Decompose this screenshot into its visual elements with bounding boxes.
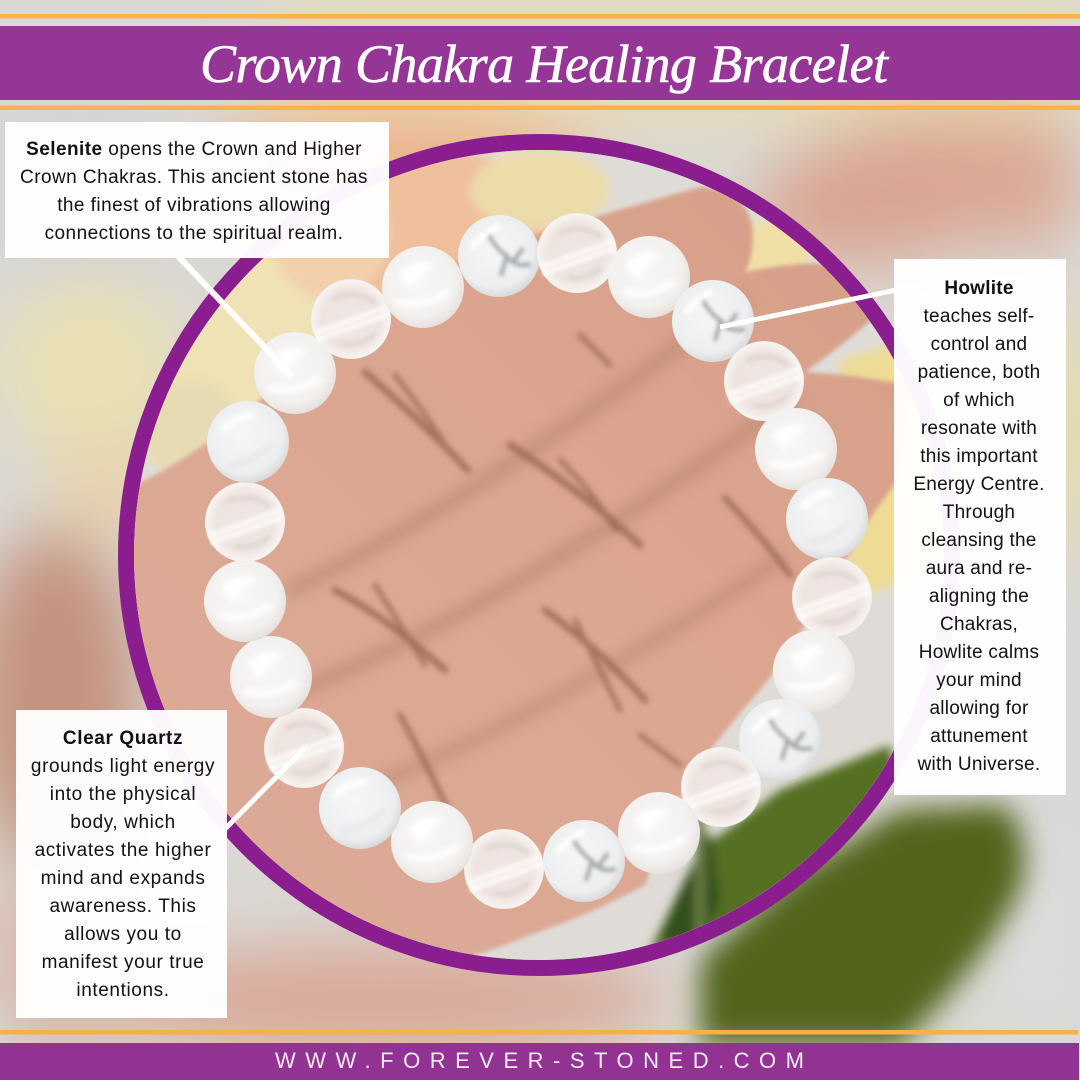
- callout: howlite: with Universe.: [918, 754, 1040, 775]
- callout: selenite: [5, 122, 389, 258]
- callout: howlite: Howlite calms: [919, 642, 1039, 663]
- callout: selenite: the finest of vibrations allowing: [57, 195, 331, 216]
- hand: [125, 187, 905, 970]
- callout: clear quartz: [16, 710, 227, 1018]
- callout: clear quartz: manifest your true: [42, 952, 204, 973]
- callout: clear quartz: awareness. This: [50, 896, 196, 917]
- callout: howlite: cleansing the: [921, 530, 1037, 551]
- callout: selenite: Crown Chakras. This ancient stone has: [20, 167, 368, 188]
- callout: howlite: [894, 259, 1066, 795]
- circular photo of hand and flowers: [134, 150, 894, 960]
- callout: howlite: Through: [943, 502, 1015, 523]
- footer banner: [0, 1043, 1079, 1080]
- callout: howlite: aura and re-: [926, 558, 1032, 579]
- pointer line: selenite: [178, 256, 292, 376]
- callout: clear quartz: activates the higher: [35, 840, 211, 861]
- callout: howlite: resonate with: [921, 418, 1037, 439]
- callout: howlite: attunement: [930, 726, 1028, 747]
- bottom gold rule: [0, 1030, 1078, 1034]
- second gold rule: [0, 106, 1080, 110]
- title banner: [0, 26, 1080, 100]
- website address: WWW.FOREVER-STONED.COM: [275, 1048, 804, 1073]
- callout: howlite: Energy Centre.: [913, 474, 1045, 495]
- callout: clear quartz: intentions.: [76, 980, 170, 1001]
- top gold rule: [0, 14, 1080, 18]
- purple ring: [126, 142, 952, 968]
- callout: howlite: teaches self-: [924, 306, 1034, 327]
- callout: howlite: allowing for: [929, 698, 1029, 719]
- callout: selenite: connections to the spiritual realm.: [45, 223, 343, 244]
- callout: howlite: Chakras,: [940, 614, 1018, 635]
- callout: howlite: control and: [931, 334, 1027, 355]
- callout: clear quartz: mind and expands: [41, 868, 205, 889]
- callout: howlite: of which: [943, 390, 1015, 411]
- pointer line: howlite: [720, 284, 925, 327]
- callout: howlite: patience, both: [918, 362, 1040, 383]
- callout: howlite: this important: [920, 446, 1038, 467]
- bracelet: [204, 213, 872, 909]
- callout: howlite: aligning the: [929, 586, 1029, 607]
- callout: howlite: your mind: [936, 670, 1022, 691]
- callout: clear quartz: Clear Quartz: [63, 728, 183, 749]
- callout: howlite: Howlite: [944, 278, 1014, 299]
- callout: clear quartz: into the physical: [50, 784, 196, 805]
- callout: selenite: Selenite opens the Crown and Higher: [26, 139, 362, 160]
- callout: clear quartz: body, which: [70, 812, 176, 833]
- callout: clear quartz: grounds light energy: [31, 756, 215, 777]
- callout: clear quartz: allows you to: [64, 924, 182, 945]
- pointer line: clear quartz: [222, 748, 305, 832]
- title: Crown Chakra Healing Bracelet: [200, 34, 890, 94]
